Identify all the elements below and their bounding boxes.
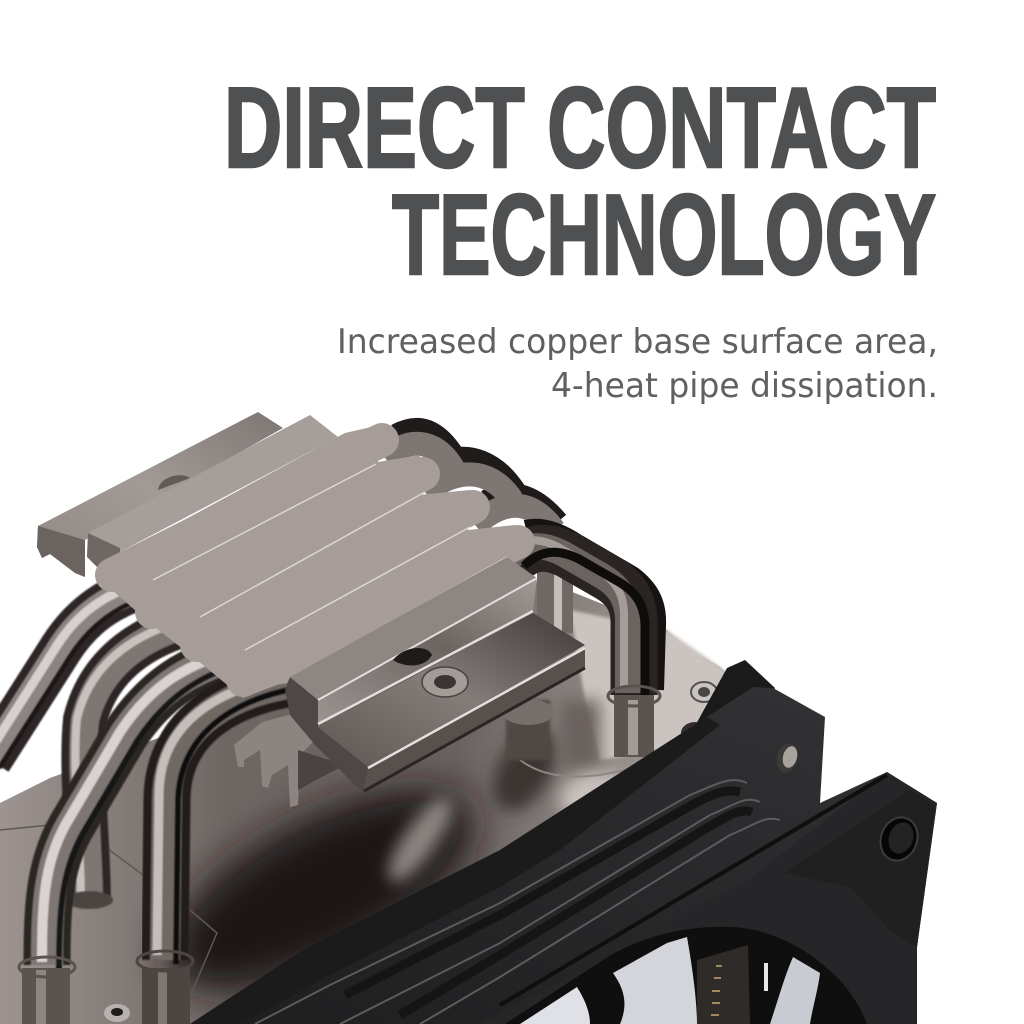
- plate ridge: [318, 578, 537, 723]
- fan grille: [697, 945, 750, 1024]
- fan: [190, 687, 937, 1024]
- polished base plate: [0, 580, 760, 1024]
- front band: [480, 772, 937, 1024]
- fan rear rim: [690, 660, 775, 735]
- dark edge of frame: [190, 717, 720, 1024]
- frame: [190, 687, 937, 1024]
- lower rivet: [104, 1004, 130, 1022]
- second fin plate: [87, 415, 338, 570]
- corner triangle: [783, 790, 935, 947]
- pipe caps: [110, 425, 518, 698]
- rivet on base plate: [691, 682, 717, 702]
- rounded cap ends: [112, 440, 518, 680]
- front fin plate: [285, 557, 585, 793]
- plate side: [285, 677, 368, 793]
- lower collars and stems: [19, 951, 193, 1024]
- fan frame screw: [773, 741, 801, 775]
- subtitle: 4-heat pipe dissipation.: [551, 366, 938, 406]
- mount plate seam: [0, 825, 217, 1020]
- subtitle: [337, 322, 938, 406]
- plate flat: [318, 613, 585, 767]
- product photo: CPU cooler: [0, 412, 937, 1024]
- title: [224, 65, 936, 299]
- rear fin plate: [37, 412, 283, 577]
- front U-shaped heat pipe: [503, 524, 661, 757]
- cap separator lines: [153, 464, 507, 679]
- plate raised top: [290, 557, 537, 700]
- plate lip: [363, 647, 585, 793]
- front plate slot: [393, 648, 432, 665]
- lower fin tips: [234, 712, 345, 807]
- rear heat pipes: [385, 426, 560, 530]
- subtitle: Increased copper base surface area,: [337, 322, 938, 362]
- left heat pipes: [0, 579, 306, 1024]
- pipe collar and stem: [614, 695, 654, 757]
- front plate screw: [422, 667, 468, 697]
- ribs: [255, 780, 780, 1024]
- fan corner hole: [875, 812, 923, 866]
- mounting notch: [158, 475, 190, 490]
- fan blades: [520, 937, 820, 1024]
- fan opening: [505, 927, 867, 1024]
- upright stems behind front plate: [502, 563, 573, 760]
- rib shadows: [345, 791, 752, 1015]
- rear hole in base plate: [681, 722, 709, 744]
